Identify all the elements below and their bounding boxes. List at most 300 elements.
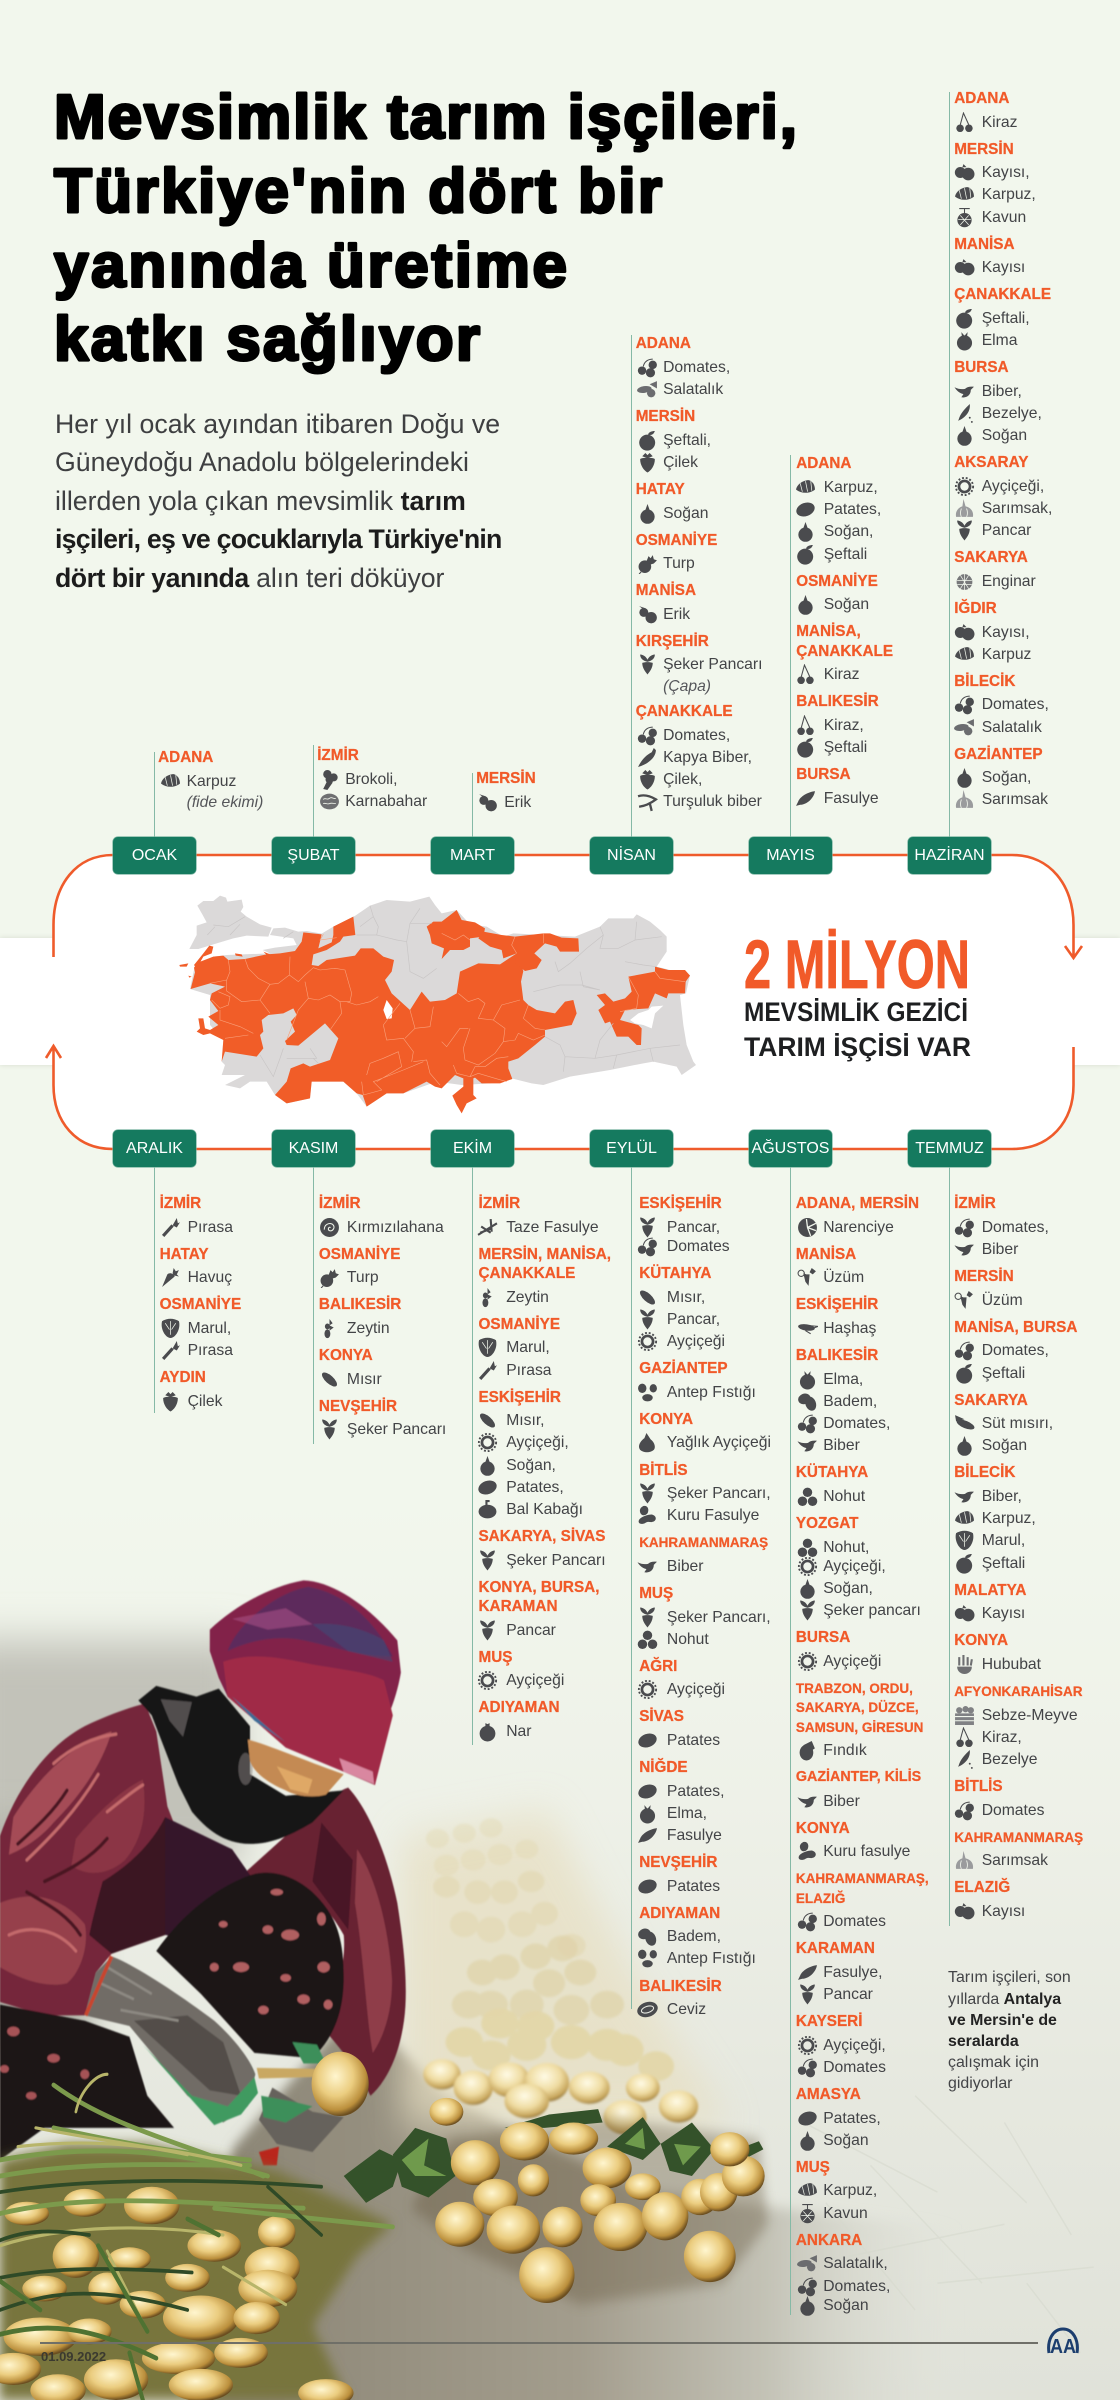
heading: NİĞDE [639,1759,688,1776]
heading: SAKARYA [954,1392,1028,1409]
column: Mayıs [790,455,955,837]
item: Biber: Biber [823,1437,860,1454]
province: Manisa [950,235,1114,280]
item: Şeftali: Şeftali [982,1365,1025,1382]
province: Hatay [636,481,708,524]
province: Ağrı [632,1657,796,1702]
heading: AYDIN [160,1369,206,1386]
item: Fındık: Fındık [823,1742,867,1759]
title: Türkiye'nin dört bir [54,157,662,226]
province: İzmir [473,1194,637,1239]
province: Osmaniye [636,531,717,574]
province: Gaziantep, Kilis [791,1768,955,1813]
item: Mısır: Mısır, [506,1412,545,1429]
heading: ÇANAKKALE [636,703,733,720]
item: Ayçiçeği: Ayçiçeği [667,1681,725,1698]
province: Eskişehir [791,1295,955,1340]
item: Biber [950,381,1114,403]
heading: AMASYA [796,2086,861,2103]
item: Kayısı [950,622,1114,644]
side note: çalışmak için [948,2054,1039,2071]
glove green [143,2045,258,2125]
province: Mersin [950,140,1114,229]
shadow beneath onions [411,2117,768,2305]
province: Hatay [155,1245,319,1290]
title: katkı sağlıyor [54,305,480,374]
province: Bitlis [632,1461,796,1528]
province: Adana [796,455,881,565]
heading: GAZİANTEP [639,1360,728,1377]
item: Sebze-Meyve [950,1704,1114,1727]
item: Soğan [791,2130,955,2152]
item: Turp: Turp [347,1269,379,1286]
item: Domates: Domates, [663,727,730,744]
heading: BİTLİS [639,1462,688,1479]
item: Süt mısırı: Süt mısırı, [982,1415,1053,1432]
heading [796,1869,955,1908]
heading: BALIKESİR [796,1347,878,1364]
intro text: dört bir yanında alın teri döküyor [55,563,444,593]
heading: MUŞ [639,1585,673,1602]
item: Nohut: Nohut, [823,1539,869,1556]
skirt knee [156,1873,344,2058]
heading: MUŞ [478,1649,512,1666]
item: Kayısı [950,257,1114,280]
heading: ADANA [158,749,213,766]
province: Adana [950,89,1114,134]
heading: ADANA, MERSİN [796,1195,919,1212]
month: Mart [431,837,514,874]
black neck scarf [138,1686,344,1844]
item: Erik [479,794,532,812]
column: Temmuz [949,1167,1114,1926]
month: Ocak [113,837,196,874]
month: Nisan: NİSAN [607,847,656,864]
item: Ayçiçeği: Ayçiçeği, [506,1434,569,1451]
month: Eylül: EYLÜL [606,1140,657,1157]
item: Turp [314,1267,478,1290]
item: Kuru Fasulye: Kuru Fasulye [667,1507,759,1524]
item: Erik [639,606,690,624]
item: Domates [638,358,730,378]
item: Pırasa [155,1340,319,1363]
item: Soğan: Soğan [823,2132,869,2149]
item: Nohut [632,1629,796,1651]
province: Kayseri [791,2012,955,2079]
item: Ayçiçeği: Ayçiçeği, [823,1558,886,1575]
heading [796,1679,955,1737]
mid onion rows [423,2059,698,2134]
item: Ayçiçeği [473,1670,637,1692]
item: Narenciye [791,1217,955,1239]
item: Fasulye: Fasulye, [823,1964,882,1981]
month: Nisan [590,837,673,874]
item: Şeker Pancarı [632,1607,796,1629]
item: Ayçiçeği [632,1679,796,1702]
item: Badem: Badem, [823,1393,877,1410]
item: Kayısı: Kayısı [982,259,1025,276]
item: Üzüm [791,1267,955,1290]
province: İzmir [950,1194,1114,1261]
item: Turşuluk biber: Turşuluk biber [663,793,762,810]
item: Kuru Fasulye [632,1505,796,1528]
item: Biber [791,1435,955,1458]
glove grey [85,1956,255,2122]
intro text: Her yıl ocak ayından itibaren Doğu ve [55,409,500,439]
heading: TRABZON, ORDU, [796,1681,913,1696]
item: Soğan: Soğan [663,505,708,522]
item: Fasulye [791,788,955,810]
item: Şeker Pancarı [640,654,762,674]
side note: yıllarda Antalya [948,1991,1061,2008]
item: Domates [950,1800,1114,1822]
item: Kiraz: Kiraz, [982,1729,1022,1746]
item: Şeftali [950,1363,1114,1385]
heading: İZMİR [317,747,359,764]
item: Domates: Domates, [982,1219,1049,1236]
item: Yağlık Ayçiçeği: Yağlık Ayçiçeği [667,1434,771,1451]
heading: MANİSA [954,236,1015,253]
item: Ceviz [632,1999,796,2021]
heading: MERSİN [636,408,695,425]
item: Havuç: Havuç [188,1269,232,1286]
column: Eylül [631,1167,796,2009]
province: Balıkesir [632,1977,796,2021]
item: Domates: Domates [823,1913,886,1930]
item: Üzüm [950,1290,1114,1312]
item: Bal Kabağı: Bal Kabağı [506,1501,583,1518]
item: Pırasa [155,1217,319,1239]
item: Haşhaş [791,1318,955,1340]
item: Kayısı: Kayısı, [982,624,1030,640]
heading [796,622,955,661]
heading: SAMSUN, GİRESUN [796,1720,923,1735]
province: Amasya [791,2085,955,2152]
month: Aralık [113,1130,196,1167]
item: Ayçiçeği [791,2035,955,2057]
heading: SAKARYA, SİVAS [478,1528,605,1545]
province: Mersin [950,1267,1114,1312]
item: Salatalık: Salatalık [982,719,1042,736]
column: Haziran [949,92,1114,837]
item: Antep Fıstığı: Antep Fıstığı [667,1384,756,1401]
item: Şeker Pancarı: Şeker Pancarı [663,656,762,673]
month: Şubat: ŞUBAT [287,847,340,864]
item: Ayçiçeği [950,476,1114,498]
item: Kiraz [791,664,955,686]
province: Aksaray [950,453,1114,543]
province: Osmaniye [796,572,878,615]
item: Pancar: Pancar [982,522,1031,539]
province: Malatya [950,1581,1114,1626]
province: İzmir [314,1194,478,1239]
item: Bezelye: Bezelye [982,1751,1038,1768]
province: Mersin [476,769,536,812]
item: Çilek [640,770,702,790]
item: Patates: Patates [667,1732,720,1749]
heading: GAZİANTEP [954,746,1043,763]
item: Patates [632,1876,796,1898]
item: Taze Fasulye: Taze Fasulye [506,1219,599,1236]
heading: KAHRAMANMARAŞ [639,1535,768,1550]
item: Domates: Domates [982,1802,1044,1819]
item: Marul: Marul, [188,1320,231,1337]
heading: MUŞ [796,2159,830,2176]
column: Mart [472,773,637,837]
heading [478,1245,637,1283]
province: Çanakkale [636,703,762,812]
province: Eskişehir [473,1388,637,1521]
item: Pancar [632,1309,796,1331]
item: Kuru fasulye [791,1841,955,1864]
heading: KÜTAHYA [796,1464,868,1481]
column: Nisan [631,335,796,837]
heading: BİLECİK [954,673,1015,690]
jacket front arm [0,1704,196,2015]
province: Bilecik [950,1463,1114,1575]
item: Patates [632,1730,796,1752]
item: Karpuz [796,479,878,496]
item: Badem [791,1391,955,1413]
province: Bilecik [950,672,1114,739]
side note: ve Mersin'e de [948,2012,1057,2029]
month: Aralık: ARALIK [126,1140,183,1157]
item: Domates [950,1340,1114,1363]
province: Adıyaman [632,1904,796,1971]
province: Adıyaman [473,1698,637,1743]
province: Kütahya [632,1264,796,1354]
province: Gaziantep [632,1359,796,1404]
item: Patates: Patates [667,1878,720,1895]
note: (Çapa) [663,678,711,695]
heading: KARAMAN [478,1598,558,1615]
item: Sarımsak [950,498,1114,520]
column: Ocak [154,752,319,837]
footer rule [40,2342,1038,2344]
month: Temmuz [908,1130,991,1167]
item: Antep Fıstığı [632,1382,796,1404]
province: Adana [636,335,730,398]
onion heap left [0,2144,393,2400]
province: Muş [632,1584,796,1651]
item: Kiraz [950,1727,1114,1749]
item: Bezelye [950,1749,1114,1771]
item: Zeytin [314,1318,478,1340]
item: Karpuz [950,184,1114,207]
item: Karpuz: Karpuz [982,646,1031,663]
province: Bitlis [950,1777,1114,1822]
item: Şeker Pancarı: Şeker Pancarı [347,1421,446,1438]
province: Iğdır [950,599,1114,666]
item: Üzüm: Üzüm [982,1292,1023,1309]
face [248,1739,344,1796]
heading: ELAZIĞ [796,1891,845,1906]
item: Şeftali: Şeftali [824,739,867,756]
item: Çilek [155,1391,319,1413]
item: Biber [950,1239,1114,1261]
item: Şeker Pancarı [314,1419,478,1441]
item: Domates: Domates, [982,696,1049,713]
item: Ayçiçeği [473,1432,637,1455]
note: (fide ekimi) [187,794,263,811]
item: Pancar [950,520,1114,543]
item: Taze Fasulye [473,1217,637,1239]
onion in hand [312,2052,369,2116]
heading: BALIKESİR [319,1296,401,1313]
item: Brokoli: Brokoli, [345,771,398,788]
item: Bezelye: Bezelye, [982,405,1042,422]
item: Şeftali [797,545,867,565]
item: Sarımsak: Sarımsak [982,1852,1048,1869]
province: Muş [791,2158,955,2225]
item: Enginar: Enginar [982,573,1036,590]
item: Biber: Biber [667,1558,704,1575]
month: Mart: MART [450,847,495,864]
province: Konya [791,1819,955,1864]
leaves among onions [344,2109,763,2203]
item: Kırmızılahana: Kırmızılahana [347,1219,444,1236]
province: Balıkesir [791,1346,955,1458]
item: Zeytin: Zeytin [506,1289,549,1306]
item: Pırasa: Pırasa [506,1362,552,1379]
item: Domates [632,1236,796,1258]
logo: AA: AA [1050,2336,1076,2358]
column: Aralık [154,1167,319,1413]
item: Şeftali: Şeftali [824,546,867,563]
item: Brokoli [323,770,398,790]
item: Çilek: Çilek, [663,771,702,788]
item: Pancar [473,1620,637,1642]
item: Pancar [632,1217,796,1239]
item: Domates: Domates, [982,1342,1049,1359]
heading: YOZGAT [796,1515,858,1532]
item: Şeftali: Şeftali, [663,432,711,449]
province: Sakarya [950,1391,1114,1458]
heading: SAKARYA [954,549,1028,566]
item: Bezelye [950,403,1114,425]
heading: KONYA, BURSA, [478,1579,599,1596]
province: Bursa [791,1628,955,1673]
item: Ayçiçeği: Ayçiçeği, [982,478,1044,495]
item: Şeker Pancarı: Şeker Pancarı, [667,1485,771,1502]
heading: BALIKESİR [796,693,879,710]
item: Karpuz: Karpuz, [982,1510,1036,1527]
province: Manisa [636,581,696,624]
item: Domates: Domates [823,2059,886,2076]
item: Patates: Patates, [824,501,881,518]
province: Yozgat [791,1514,955,1623]
heading: MERSİN [954,1268,1014,1285]
province: İzmir [155,1194,319,1239]
orange year cycle loop with arrows [45,854,1083,1150]
item: Mısır: Mısır [347,1371,382,1388]
heading: AFYONKARAHİSAR [954,1684,1082,1699]
heading: ÇANAKKALE [954,286,1051,303]
province: Kırşehir [636,632,762,695]
item: Mısır: Mısır, [667,1289,705,1306]
item: Marul [155,1318,319,1340]
heading: ESKİŞEHİR [796,1296,878,1313]
item: Kırmızılahana [314,1217,478,1239]
heading: MALATYA [954,1582,1026,1599]
item: Süt mısırı [950,1413,1114,1435]
province: Kahramanmaraş, Elazığ [791,1869,955,1934]
heading: KAYSERİ [796,2013,862,2030]
heading: MERSİN [954,141,1014,158]
month: Ağustos [749,1130,832,1167]
item: Çilek: Çilek [663,454,698,471]
intro text [55,409,502,593]
item: Patates [791,2108,955,2130]
item: Hububat [950,1654,1114,1676]
side note: seralarda [948,2033,1019,2050]
item: Kavun [950,207,1114,229]
item: Şeker Pancarı: Şeker Pancarı [506,1552,606,1569]
heading: NEVŞEHİR [319,1398,397,1415]
heading: ADIYAMAN [478,1699,560,1716]
province: Konya [632,1410,796,1455]
white central band [0,938,1120,1065]
item: Domates [638,726,730,746]
item: Soğan [950,767,1114,789]
heading: OSMANİYE [478,1316,560,1333]
province: Karaman [791,1939,955,2006]
item: Kiraz: Kiraz [824,666,859,683]
province: Elazığ [950,1878,1114,1923]
photo: seasonal worker harvesting onions [0,1579,1094,2400]
province: Bursa [791,765,955,810]
heading: ADANA [796,455,851,472]
item: Ceviz: Ceviz [667,2001,706,2018]
item: Pancar: Pancar [823,1986,873,2003]
item: Fasulye [632,1825,796,1847]
heading: İZMİR [319,1195,361,1212]
item: Ayçiçeği: Ayçiçeği [823,1653,881,1670]
province: Trabzon, Ordu, Sakarya, Düzce, Samsun, Giresun [791,1679,955,1762]
item: Elma: Elma [982,332,1017,349]
head scarf [210,1580,401,1785]
item: Domates: Domates, [663,359,730,376]
province: Osmaniye [473,1315,637,1382]
worker [0,1580,406,2165]
item: Karpuz [161,773,236,790]
side note: gidiyorlar [948,2075,1012,2092]
item: Elma [791,1369,955,1391]
item: Domates [950,1217,1114,1239]
grey provinces [189,896,696,1107]
heading: NEVŞEHİR [639,1854,717,1871]
province: Kütahya [791,1463,955,1508]
skirt lower left [0,2005,174,2160]
item: Elma: Elma, [823,1371,863,1388]
province: Kahramanmaraş [950,1828,1114,1872]
province: Manisa, Çanakkale [796,622,893,684]
straw texture on the right [804,2096,1094,2353]
green onion stalks [0,2074,393,2400]
item: Soğan: Soğan, [824,523,873,540]
item: Şeftali [950,1553,1114,1575]
item: Ayçiçeği [791,1651,955,1673]
item: Çilek [640,453,698,472]
month: Eylül [590,1130,673,1167]
province: Sivas [632,1707,796,1752]
heading: ELAZIĞ [954,1879,1010,1896]
heading: İZMİR [160,1195,201,1212]
item: Fasulye: Fasulye [667,1827,722,1844]
month: Mayıs: MAYIS [766,847,815,864]
item: Patates: Patates, [667,1783,724,1800]
heading: ADIYAMAN [639,1905,720,1922]
